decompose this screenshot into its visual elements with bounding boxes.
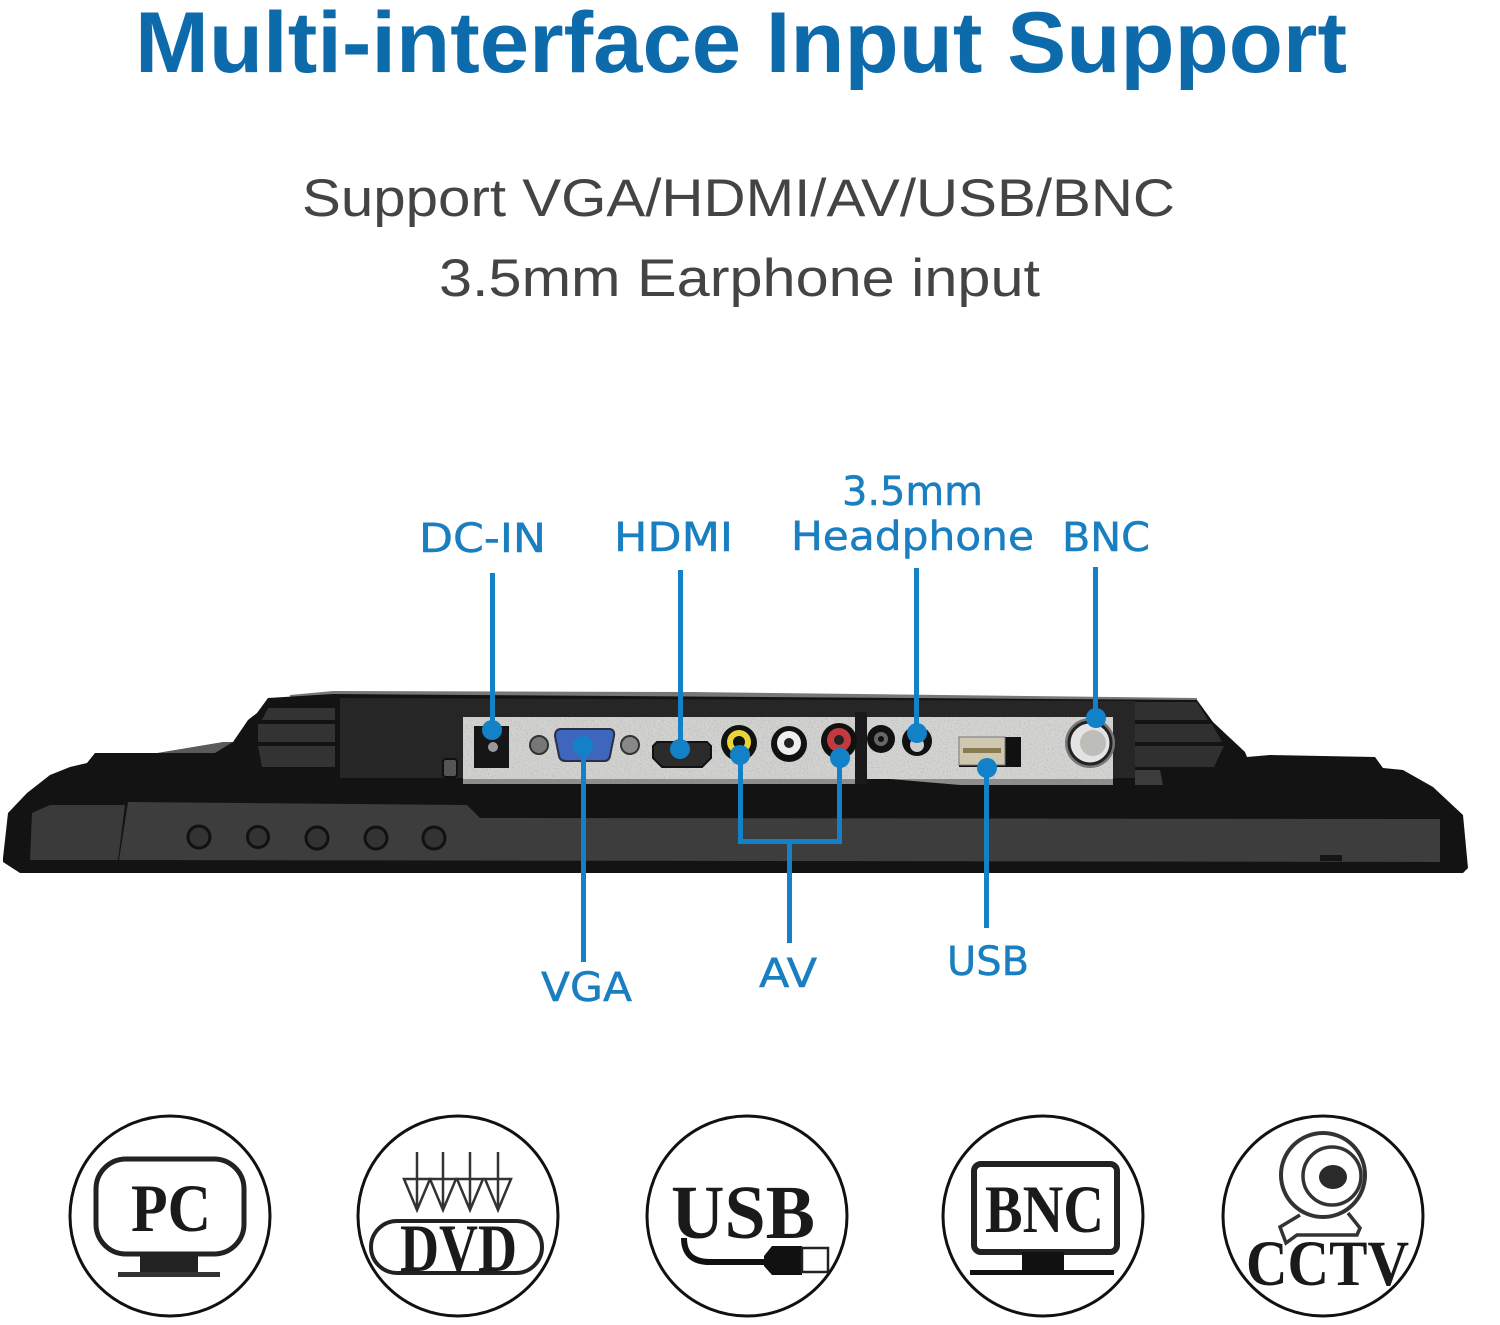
subtitle text block: 3.5mm Earphone input — [439, 249, 1040, 308]
USB port — [959, 737, 1021, 767]
label: DC-IN: DC-IN — [419, 516, 546, 562]
icon: BNC: BNC — [985, 1171, 1104, 1247]
pointer: USB — [977, 758, 997, 928]
small slot mark — [1320, 855, 1342, 861]
monitor bottom view photo — [3, 691, 1468, 873]
label: VGA: VGA — [541, 965, 633, 1011]
pointer: AV bracket — [730, 745, 850, 943]
icon: PC: PC — [131, 1170, 211, 1246]
label: HDMI: HDMI — [614, 515, 733, 561]
port plate left — [463, 717, 855, 779]
icon: PC — [70, 1116, 270, 1316]
subtitle text block: Support VGA/HDMI/AV/USB/BNC — [302, 169, 1175, 228]
VGA port — [530, 729, 639, 761]
icon: CCTV: CCTV — [1246, 1228, 1409, 1300]
pointer: headphone — [907, 568, 927, 743]
plate speckle texture — [463, 717, 1113, 779]
pointer: DC-IN — [482, 573, 502, 740]
right vent ridges — [1135, 702, 1224, 785]
pointer: BNC — [1086, 567, 1106, 728]
front panel left segment — [30, 805, 125, 860]
label: 3.5mm Headphone — [791, 469, 1034, 560]
label: 3.5mm Headphone: 3.5mm — [842, 469, 983, 515]
icon: USB — [647, 1116, 847, 1316]
icon: USB: USB — [671, 1171, 815, 1255]
headphone jack — [902, 726, 932, 756]
BNC connector — [1065, 718, 1115, 768]
icon: DVD: DVD — [400, 1210, 517, 1286]
icon: CCTV — [1223, 1116, 1423, 1316]
upper housing — [340, 698, 1135, 778]
icon: DVD — [358, 1116, 558, 1316]
pointer: VGA — [573, 736, 593, 962]
earphone jack — [867, 725, 895, 753]
pointer: HDMI — [670, 570, 690, 759]
top edge highlight — [290, 691, 1197, 701]
RCA red — [821, 723, 857, 759]
icon: BNC — [943, 1116, 1143, 1316]
gap between plates — [855, 712, 867, 784]
front panel button strip — [119, 802, 1440, 862]
RCA yellow — [721, 725, 757, 761]
front panel buttons — [188, 826, 445, 849]
RCA white — [771, 726, 807, 762]
DC jack — [474, 726, 509, 768]
HDMI port — [653, 742, 711, 767]
label: AV: AV — [759, 951, 818, 997]
blue pointer lines — [482, 567, 1106, 962]
label: BNC: BNC — [1062, 515, 1150, 561]
subtitle text block — [302, 169, 1175, 308]
plate lower strip — [463, 779, 1113, 785]
port plate right — [867, 717, 1113, 779]
monitor body silhouette — [3, 694, 1468, 873]
rear wedge highlight — [157, 742, 233, 753]
label: 3.5mm Headphone: Headphone — [791, 514, 1034, 560]
small side latch — [443, 759, 457, 777]
label: USB: USB — [947, 939, 1029, 985]
left vent ridges — [258, 708, 335, 767]
